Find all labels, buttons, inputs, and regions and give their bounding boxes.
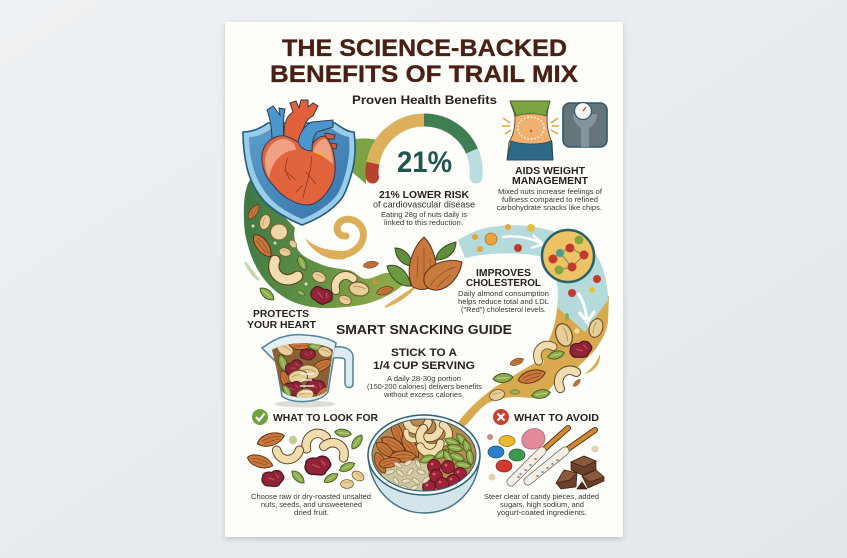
text: improves cholesterol <box>458 267 549 314</box>
text: look for: dried fruit. <box>294 508 329 517</box>
text: look for: nuts, seeds, and unsweetened <box>261 500 362 509</box>
text: aids weight management: Mixed nuts increase feelings of <box>498 187 603 196</box>
label: protects your heart: PROTECTS <box>253 308 309 320</box>
paper card <box>225 22 623 537</box>
text: aids weight management: MANAGEMENT <box>512 175 589 187</box>
text: stick to a 1/4 cup serving: STICK TO A <box>391 347 457 359</box>
chocolate pieces <box>556 456 604 489</box>
icon: heart <box>262 100 337 205</box>
icon: molecule lens <box>542 230 594 282</box>
heading: proven health benefits: Proven Health Benefits <box>352 93 497 107</box>
arrow: to molecule lens <box>502 235 543 248</box>
molecules on ribbon <box>472 224 601 297</box>
blue ribbon <box>458 225 608 332</box>
text: aids weight management: AIDS WEIGHT <box>515 165 586 177</box>
text: lower risk: linked to this reduction. <box>384 218 463 227</box>
icon: almonds with leaves <box>387 237 462 290</box>
title <box>270 35 578 88</box>
yogurt pretzels <box>511 428 595 482</box>
text: stick to a 1/4 cup serving <box>367 347 482 399</box>
text: look for: Choose raw or dry-roasted unsalted <box>251 492 371 501</box>
text: avoid: Steer clear of candy pieces, added <box>484 492 599 501</box>
text: stick to a 1/4 cup serving: A daily 28-30g portion <box>387 374 461 383</box>
nuts in green ribbon <box>246 203 394 307</box>
text: improves cholesterol: CHOLESTEROL <box>466 277 542 289</box>
gold ribbon <box>452 296 609 438</box>
text: lower risk: 21% LOWER RISK <box>379 189 469 201</box>
heading: what to avoid: WHAT TO AVOID <box>514 412 599 424</box>
icon: check <box>252 409 268 425</box>
infographic <box>222 22 626 542</box>
icon: weighing scale <box>563 102 607 147</box>
text: aids weight management: fullness compared to refined <box>502 195 598 204</box>
icon: cross <box>493 409 509 425</box>
icon: measuring cup <box>262 335 353 408</box>
text: lower risk: of cardiovascular disease <box>373 200 475 210</box>
text: improves cholesterol: Daily almond consumption <box>458 289 549 298</box>
title: THE SCIENCE-BACKED <box>282 35 567 62</box>
icon: waist <box>502 101 559 160</box>
gauge chart <box>366 120 482 184</box>
healthy ingredients <box>246 428 366 489</box>
heading: smart snacking guide: SMART SNACKING GUIDE <box>336 322 512 337</box>
text: aids weight management: carbohydrate snacks like chips. <box>497 203 602 212</box>
title: BENEFITS OF TRAIL MIX <box>270 61 578 88</box>
text: avoid <box>484 492 599 517</box>
stat: 21%: 21% <box>397 146 452 179</box>
arrow: down ribbon <box>578 293 595 322</box>
label: protects your heart: YOUR HEART <box>247 319 317 331</box>
text: improves cholesterol: IMPROVES <box>476 267 531 279</box>
label: protects your heart <box>247 308 317 331</box>
text: look for <box>251 492 371 517</box>
gold swirl <box>305 219 416 307</box>
text: stick to a 1/4 cup serving: without excess calories. <box>383 390 464 399</box>
green trail ribbon <box>244 138 405 308</box>
text: avoid: sugars, high sodium, and <box>500 500 584 509</box>
text: stick to a 1/4 cup serving: (150-200 calories) delivers benefits <box>367 382 482 391</box>
bowl of trail mix <box>368 415 480 513</box>
text: lower risk <box>373 189 475 227</box>
text: stick to a 1/4 cup serving: 1/4 CUP SERVING <box>373 360 475 372</box>
candy pieces <box>487 429 598 480</box>
heading: what to look for: WHAT TO LOOK FOR <box>273 412 378 424</box>
shield <box>243 123 355 225</box>
text: improves cholesterol: helps reduce total and LDL <box>458 297 549 306</box>
text: improves cholesterol: ("Red") cholesterol levels. <box>461 305 546 314</box>
text: lower risk: Eating 28g of nuts daily is <box>381 210 467 219</box>
text: avoid: yogurt-coated ingredients. <box>497 508 587 517</box>
text: aids weight management <box>497 165 603 212</box>
nuts on gold ribbon <box>488 313 605 402</box>
